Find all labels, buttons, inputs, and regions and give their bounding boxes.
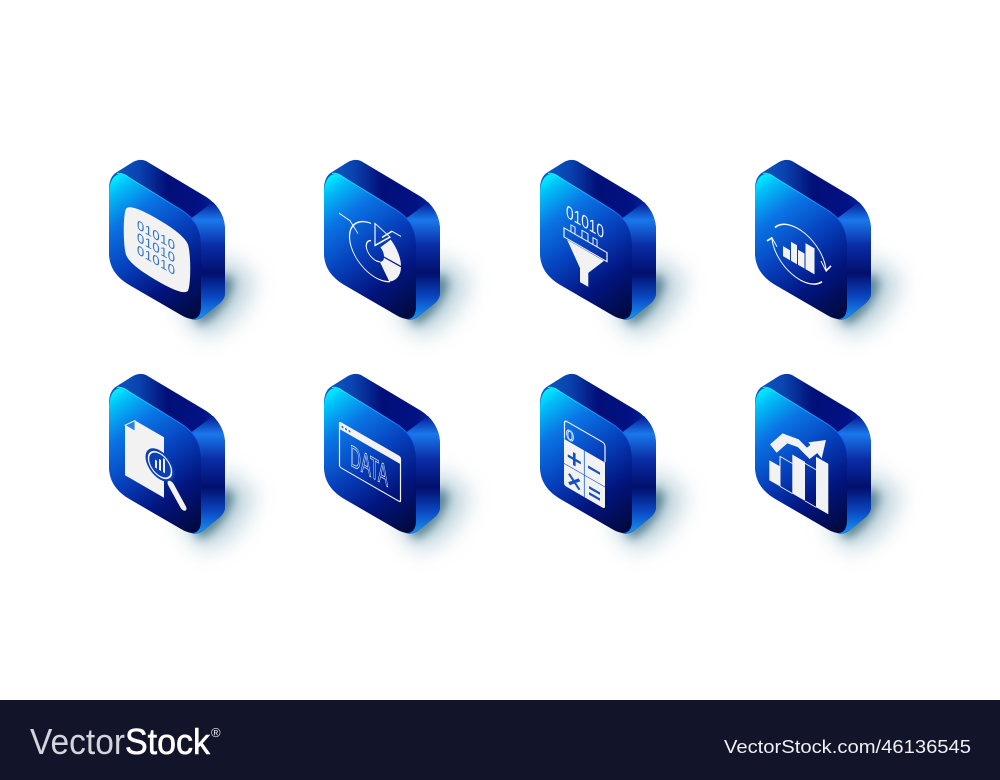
icon tile: growth chart (755, 374, 901, 550)
image id url: VectorStock.com/46136545 (724, 737, 971, 757)
icon tile: binary code (109, 160, 255, 336)
icon: funnel filtering binary digits (564, 200, 607, 298)
logo: VectorStock: ® (211, 725, 221, 740)
icon: bar chart with rising arrow (769, 407, 828, 514)
icon: binary chip: 01010 (137, 217, 175, 253)
icon: binary chip (124, 200, 190, 300)
icon: calculator (564, 420, 605, 509)
footer bar (0, 700, 1000, 780)
icon tile: document analysis (109, 374, 255, 550)
icon: bar chart inside circular arrows (767, 211, 831, 298)
logo: VectorStock: Stock (125, 721, 211, 762)
icon tile: pie chart (324, 160, 470, 336)
icon: binary chip: 01010 (137, 242, 175, 278)
icon tile: data funnel (540, 160, 686, 336)
icon: pie chart with leader lines (339, 201, 401, 292)
logo: VectorStock: Vector (30, 721, 125, 762)
icon: binary chip: 01010 (137, 229, 175, 266)
icon tile: chart refresh (755, 160, 901, 336)
icon: browser window with DATA: DATA (350, 438, 388, 494)
logo: VectorStock (30, 721, 221, 762)
icon: browser window with DATA (340, 422, 400, 502)
icon: calculator: 0 (566, 426, 574, 446)
icon: funnel filtering binary digits: 01010 (566, 201, 604, 244)
icon tile: calculator (540, 374, 686, 550)
icon tile: data window (324, 374, 470, 550)
icon: document with magnifier (125, 415, 183, 509)
